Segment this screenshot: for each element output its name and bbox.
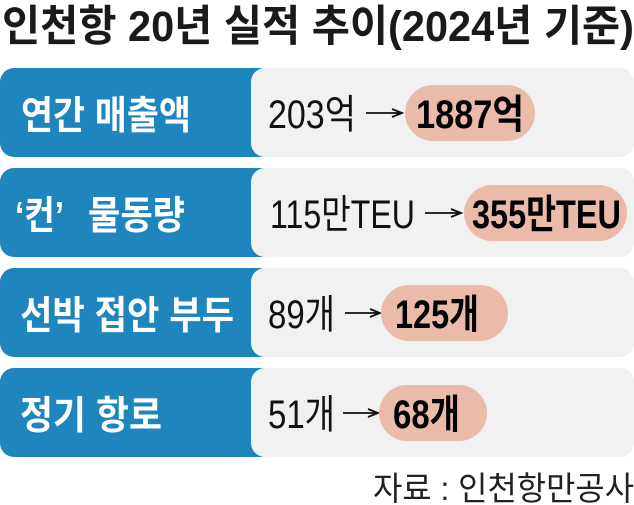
value: before: 51개 xyxy=(268,393,335,437)
label: berths: 선박 접안 부두 xyxy=(20,295,234,338)
arrow xyxy=(343,409,378,417)
highlight pill: 1887억 xyxy=(416,93,524,137)
arrow xyxy=(345,309,380,317)
highlight pill xyxy=(379,385,487,441)
label: TEU throughput: 물동량 xyxy=(88,195,185,238)
panel: regular routes xyxy=(0,368,634,457)
value: before: 203억 xyxy=(268,93,356,137)
label: routes: 정기 항로 xyxy=(20,395,162,438)
value: before: 89개 xyxy=(268,293,335,337)
label: TEU throughput: ‘컨’ xyxy=(15,195,64,238)
panel: annual revenue xyxy=(0,68,634,157)
panel: berths xyxy=(0,268,634,357)
highlight pill: 125개 xyxy=(395,293,479,337)
value: before: 115만TEU xyxy=(270,193,415,237)
label: annual revenue: 연간 매출액 xyxy=(21,95,191,138)
label: TEU throughput xyxy=(15,195,185,238)
arrow xyxy=(366,109,402,117)
panel: cone throughput xyxy=(0,168,634,257)
highlight pill xyxy=(381,285,508,341)
arrow xyxy=(425,209,461,217)
highlight pill: 68개 xyxy=(393,393,460,437)
highlight pill xyxy=(405,85,535,141)
